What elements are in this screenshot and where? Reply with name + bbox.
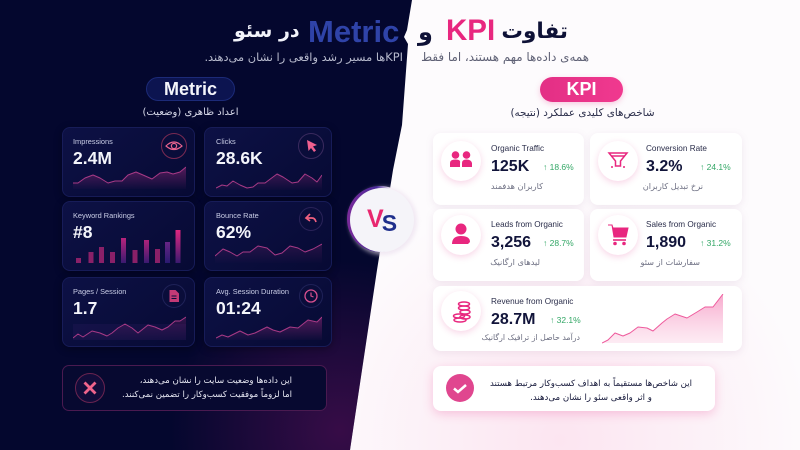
icon: lead person xyxy=(441,215,481,255)
icon: return arrow xyxy=(299,207,323,231)
callout text: و اثر واقعی سئو را نشان می‌دهند. xyxy=(530,393,652,403)
panel: Revenue from Organic: 28.7M xyxy=(491,311,535,328)
title: Metric xyxy=(308,14,399,49)
panel: Pages / Session: Pages / Session xyxy=(73,287,126,296)
panel: Leads from Organic: 3,256 xyxy=(491,234,531,251)
panel: Revenue from Organic xyxy=(433,286,742,351)
callout text xyxy=(490,376,692,403)
panel: Bounce Rate xyxy=(204,201,332,271)
panel: Sales from Organic: سفارشات از سئو xyxy=(640,257,700,267)
panel: Conversion Rate xyxy=(590,133,742,205)
Metric subtitle: اعداد ظاهری (وضعیت) xyxy=(142,107,238,118)
panel: Leads from Organic xyxy=(433,209,584,281)
KPI subtitle: شاخص‌های کلیدی عملکرد (نتیجه) xyxy=(510,107,655,119)
sparkline: Clicks xyxy=(216,174,322,188)
panel: Leads from Organic: Leads from Organic xyxy=(491,220,563,229)
panel: Sales from Organic: 1,890 xyxy=(646,234,686,251)
panel: Leads from Organic: ↑ 28.7% xyxy=(543,238,574,248)
panel: Organic Traffic: 125K xyxy=(491,158,529,175)
panel: Keyword Rankings: #8 xyxy=(73,222,92,242)
sparkline: Avg. Session Duration xyxy=(216,316,322,339)
icon: shopping cart xyxy=(598,215,638,255)
sparkline: Bounce Rate xyxy=(215,244,322,259)
panel: Impressions: 2.4M xyxy=(73,148,112,168)
panel: Pages / Session xyxy=(62,277,195,347)
panel: Revenue from Organic: درآمد حاصل از ترافیک ارگانیک xyxy=(482,333,580,342)
icon: cross xyxy=(75,373,105,403)
callout text xyxy=(122,376,292,400)
panel: Avg. Session Duration: 01:24 xyxy=(216,298,261,318)
sparkline: Pages / Session xyxy=(73,316,186,340)
panel: Keyword Rankings xyxy=(62,201,195,271)
area chart: Revenue xyxy=(602,294,724,344)
panel: Organic Traffic xyxy=(433,133,584,205)
panel: Conversion Rate: Conversion Rate xyxy=(646,144,707,153)
panel: Sales from Organic: Sales from Organic xyxy=(646,220,716,229)
VS letters: VS xyxy=(367,205,395,236)
icon: document xyxy=(162,284,186,308)
callout text: این شاخص‌ها مستقیماً به اهداف کسب‌وکار مرتبط هستند xyxy=(490,379,692,389)
sparkline: Impressions xyxy=(73,166,186,188)
panel: Sales from Organic: ↑ 31.2% xyxy=(700,238,731,248)
title: در سئو xyxy=(234,20,300,42)
panel: Conversion Rate: ↑ 24.1% xyxy=(700,162,731,172)
panel: Bounce Rate: 62% xyxy=(216,222,251,242)
panel: Impressions xyxy=(62,127,195,197)
pill: KPI xyxy=(540,77,623,102)
VS badge xyxy=(346,184,417,258)
title: KPI xyxy=(446,14,495,47)
panel: Conversion Rate: 3.2% xyxy=(646,158,682,175)
panel: Revenue from Organic: ↑ 32.1% xyxy=(550,315,581,325)
panel: Sales from Organic xyxy=(590,209,742,281)
panel: Clicks: Clicks xyxy=(216,137,236,146)
icon: eye xyxy=(161,133,187,159)
panel: Bounce Rate: Bounce Rate xyxy=(216,211,259,220)
subtitle: KPIها مسیر رشد واقعی را نشان می‌دهند. xyxy=(204,50,403,64)
pill: KPI: KPI xyxy=(566,79,596,99)
icon: funnel xyxy=(598,141,638,181)
panel: Clicks: 28.6K xyxy=(216,148,263,168)
callout: KPI confirmation xyxy=(433,366,715,411)
title: تفاوت xyxy=(501,19,568,44)
title: و xyxy=(418,18,433,46)
subtitle xyxy=(204,50,589,64)
panel: Leads from Organic: لیدهای ارگانیک xyxy=(490,257,540,267)
panel: Avg. Session Duration xyxy=(204,277,332,347)
panel: Organic Traffic: Organic Traffic xyxy=(491,144,544,153)
title xyxy=(233,14,568,49)
subtitle: همه‌ی داده‌ها مهم هستند، اما فقط xyxy=(421,50,589,64)
panel: Keyword Rankings: Keyword Rankings xyxy=(73,211,135,220)
pill: Metric: Metric xyxy=(164,79,217,99)
panel: Clicks xyxy=(204,127,332,197)
icon: check xyxy=(446,374,474,402)
pill: Metric xyxy=(146,77,235,101)
callout: Metric warning xyxy=(62,365,327,411)
panel: Organic Traffic: کاربران هدفمند xyxy=(491,181,543,191)
bar chart: Keyword Rankings xyxy=(76,230,180,263)
callout text: این داده‌ها وضعیت سایت را نشان می‌دهند، xyxy=(140,376,292,386)
icon: cursor xyxy=(298,133,324,159)
panel: Organic Traffic: ↑ 18.6% xyxy=(543,162,574,172)
panel: Avg. Session Duration: Avg. Session Duration xyxy=(216,287,289,296)
icon: clock xyxy=(299,284,323,308)
callout text: اما لزوماً موفقیت کسب‌وکار را تضمین نمی‌کنند. xyxy=(122,390,292,400)
panel: Revenue from Organic: Revenue from Organic xyxy=(491,297,573,306)
panel: Pages / Session: 1.7 xyxy=(73,298,97,318)
icon: coins xyxy=(441,291,481,331)
icon: users xyxy=(441,141,481,181)
panel: Conversion Rate: نرخ تبدیل کاربران xyxy=(643,181,703,191)
panel: Impressions: Impressions xyxy=(73,137,113,146)
